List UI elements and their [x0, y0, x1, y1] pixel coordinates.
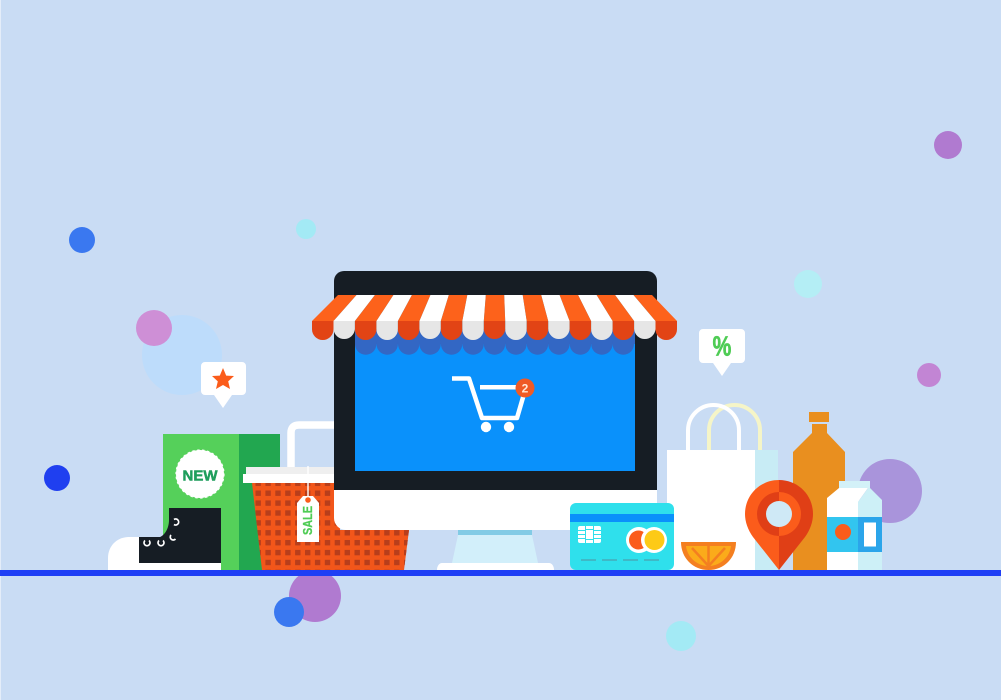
location pin	[745, 480, 813, 570]
orange slice	[681, 542, 736, 570]
screen	[355, 330, 635, 471]
icon: shopping cart	[452, 378, 534, 432]
sale tag	[297, 466, 319, 542]
card number	[581, 559, 659, 561]
striped awning	[312, 295, 677, 340]
new badge: NEW	[182, 468, 218, 484]
decorative circles	[44, 131, 962, 651]
shelf line	[0, 570, 1001, 576]
cart badge: 2	[522, 382, 529, 396]
orange bottle	[793, 412, 845, 570]
sale tag: SALE	[301, 506, 315, 535]
icon: percent speech bubble	[699, 329, 745, 376]
product box	[163, 434, 280, 570]
credit card	[570, 503, 674, 570]
shopping bags	[667, 405, 778, 570]
icon: percent speech bubble: %	[713, 332, 731, 362]
card logo	[626, 527, 667, 553]
desktop monitor	[334, 271, 657, 530]
awning shadow	[355, 330, 635, 355]
icon: star speech bubble	[201, 362, 246, 408]
sneaker	[108, 508, 221, 570]
card chip	[578, 526, 601, 543]
shopping basket	[243, 425, 409, 570]
milk carton	[827, 481, 882, 570]
monitor stand	[437, 530, 554, 570]
